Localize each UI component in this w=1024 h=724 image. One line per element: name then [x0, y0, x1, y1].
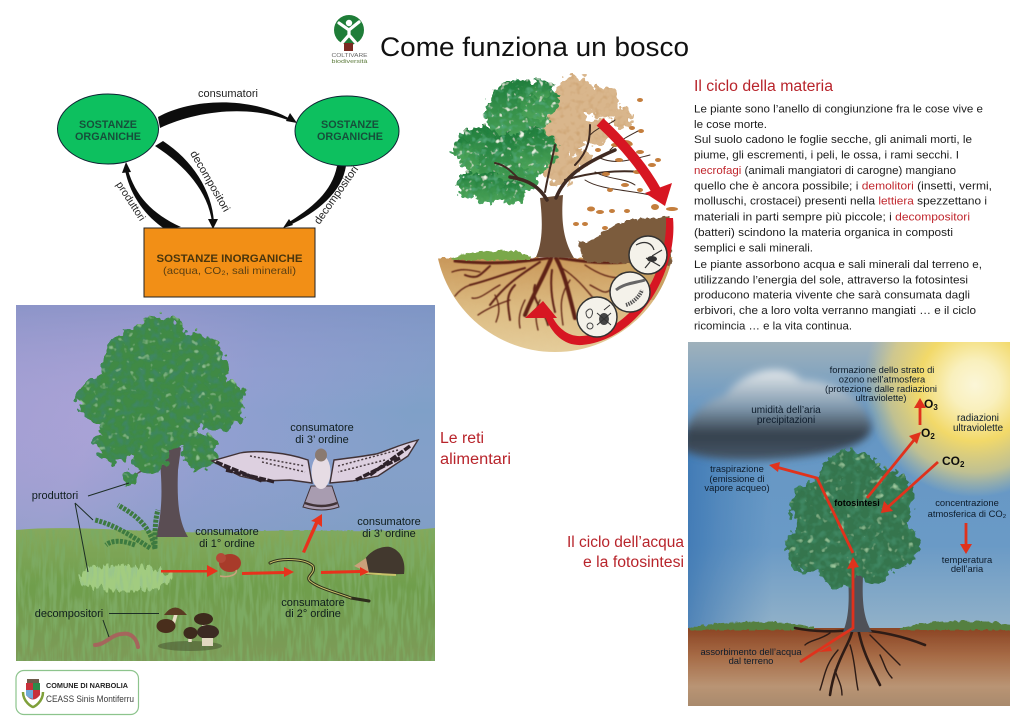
box: sostanze inorganiche: SOSTANZE INORGANICHE [156, 253, 303, 265]
labels: consumatore [290, 422, 354, 434]
ellipse: sostanze organiche right: ORGANICHE [317, 131, 383, 143]
footer badge: Comune di Narbolia [16, 670, 138, 714]
labels: fotosintesi [834, 498, 880, 508]
label: decompositori right: decompositori [312, 164, 361, 227]
sky [16, 305, 435, 540]
ellipse: sostanze organiche left [58, 94, 158, 164]
snake [270, 560, 369, 601]
logo: Coltivare biodiversità [332, 15, 369, 65]
roots [452, 256, 625, 330]
icon: municipal coat of arms [23, 679, 43, 707]
arrow: consumatori [158, 102, 297, 128]
labels: (protezione dalle radiazioni [825, 383, 937, 394]
arrowheads [769, 398, 972, 652]
text block: cycle of matter: erbivori, che a loro volta verranno mangiati … e il ciclo [694, 305, 976, 317]
chemical labels: 3 [933, 403, 938, 412]
hedgehog [354, 547, 404, 575]
labels: produttori [32, 490, 78, 502]
labels: (emissione di [709, 473, 765, 484]
trunk [536, 195, 574, 258]
labels [32, 422, 421, 620]
labels: radiazioni [957, 413, 999, 424]
branches [495, 120, 650, 200]
mouse [216, 553, 241, 577]
labels: umidità dell’aria [751, 405, 821, 416]
food chain arrows [161, 514, 369, 577]
text block: cycle of matter: materiali in parti sempre più piccole; i decompositori [694, 212, 970, 224]
decomposing mound [577, 216, 672, 265]
label: le reti alimentari: Le reti [440, 430, 484, 447]
panel: food web illustration [16, 305, 435, 661]
label: il ciclo dell'acqua e la fotosintesi: Il ciclo dell’acqua [567, 534, 684, 551]
text block: cycle of matter [694, 104, 992, 332]
labels [700, 364, 1007, 666]
label: il ciclo dell'acqua e la fotosintesi [567, 534, 684, 571]
text block: cycle of matter: ricomincia … e la vita continua. [694, 320, 852, 332]
text block: cycle of matter: le cose morte. [694, 119, 767, 131]
sun glow [866, 342, 1010, 494]
labels: di 3’ ordine [362, 528, 416, 540]
labels: ozono nell’atmosfera [839, 374, 926, 384]
text block: cycle of matter: (batteri) scindono la materia organica in composti [694, 227, 953, 239]
footer badge: Comune di Narbolia: COMUNE DI NARBOLIA [46, 681, 129, 690]
chemical labels: O [924, 397, 933, 411]
leader lines [75, 483, 159, 637]
logo: Coltivare biodiversità: COLTIVARE [332, 53, 368, 59]
soil half-disc [438, 257, 672, 352]
sky [688, 342, 1010, 632]
falling leaves [573, 98, 678, 230]
arrow: red crescent [525, 218, 673, 345]
labels: assorbimento dell’acqua [700, 646, 802, 657]
label: produttori: produttori [113, 179, 148, 223]
text block: cycle of matter: necrofagi (animali mangiatori di carogne) mangiano [694, 165, 956, 177]
labels: vapore acqueo) [704, 482, 770, 493]
soil [688, 628, 1010, 706]
grass tuft [79, 565, 171, 591]
text block: cycle of matter: molluschi, crostacei) presenti nella lettiera spezzettano i [694, 196, 987, 208]
ellipse: sostanze organiche right [295, 96, 399, 166]
text block: cycle of matter: Le piante sono l’anello di congiunzione fra le cose vive e [694, 104, 983, 116]
crown: green foliage [452, 80, 558, 204]
label: le reti alimentari [440, 430, 511, 468]
meadow [16, 528, 435, 661]
crown [786, 450, 919, 588]
title: Come funziona un bosco [380, 32, 689, 62]
labels: di 2° ordine [285, 608, 341, 620]
panel: water cycle and photosynthesis illustration [688, 342, 1010, 706]
chemical labels: CO [942, 454, 960, 468]
labels: di 1° ordine [199, 538, 255, 550]
labels: dal terreno [729, 655, 773, 666]
arrow: decompositori left [155, 141, 218, 229]
ellipse: sostanze organiche right: SOSTANZE [321, 119, 379, 131]
labels: temperatura [942, 554, 993, 565]
labels: di 3’ ordine [295, 434, 349, 446]
text block: cycle of matter: producono materia vivente che sarà consumata dagli [694, 290, 970, 302]
chemical labels [921, 397, 965, 469]
box: sostanze inorganiche: (acqua, CO₂, sali minerali) [163, 265, 296, 277]
labels: precipitazioni [757, 415, 815, 426]
labels: formazione dello strato di [830, 364, 934, 375]
text block: cycle of matter: piume, gli escrementi, i peli, le ossa, i rami secchi. I [694, 150, 959, 162]
box: sostanze inorganiche [144, 228, 315, 297]
labels: ultraviolette) [855, 392, 907, 403]
labels: concentrazione [935, 497, 999, 508]
labels: consumatore [281, 597, 345, 609]
diagram: cycle of organic and inorganic substances [58, 88, 399, 297]
illustration: tree and matter cycle [430, 76, 680, 358]
arrow: produttori [122, 162, 181, 229]
grass tuft [452, 250, 530, 260]
worm [95, 634, 138, 647]
labels: consumatore [357, 516, 421, 528]
labels: decompositori [35, 608, 103, 620]
detail circle: insects [629, 236, 667, 274]
text block: cycle of matter: semplici e sali minerali. [694, 242, 813, 254]
labels: dell’aria [951, 563, 984, 574]
chemical labels: 2 [960, 460, 965, 469]
ellipse: sostanze organiche left: ORGANICHE [75, 131, 141, 143]
heading: il ciclo della materia: Il ciclo della materia [694, 78, 833, 95]
text block: cycle of matter: utilizzando l’energia del sole, attraverso la fotosintesi [694, 274, 968, 286]
tree crown [76, 316, 246, 485]
cloud [682, 370, 872, 460]
label: le reti alimentari: alimentari [440, 451, 511, 468]
detail circle: larvae [610, 272, 650, 312]
process arrows [776, 405, 966, 662]
grass strip [690, 621, 1010, 630]
arrow: red down [600, 122, 672, 206]
label: decompositori middle: decompositori [187, 149, 232, 214]
crown: autumn foliage [541, 76, 632, 185]
detail circle: mite and grub [577, 297, 617, 337]
text block: cycle of matter: Sul suolo cadono le foglie secche, gli animali morti, le [694, 134, 972, 146]
roots [795, 628, 925, 695]
chemical labels: 2 [930, 432, 935, 441]
labels: atmosferica di CO₂ [928, 508, 1007, 519]
footer badge: Comune di Narbolia: CEASS Sinis Montiferru [46, 694, 134, 704]
trunk [843, 575, 872, 632]
fern [95, 505, 158, 549]
label: il ciclo dell'acqua e la fotosintesi: e la fotosintesi [583, 554, 684, 571]
text block: cycle of matter: quello che è ancora possibile; i demolitori (insetti, vermi, [694, 180, 992, 192]
trunk [136, 447, 188, 537]
arrow: decompositori right [283, 166, 346, 228]
labels: consumatore [195, 526, 259, 538]
mushrooms [156, 608, 222, 651]
labels: ultraviolette [953, 423, 1004, 434]
logo: Coltivare biodiversità: biodiversità [332, 59, 369, 65]
labels: traspirazione [710, 463, 764, 474]
ellipse: sostanze organiche left: SOSTANZE [79, 119, 137, 131]
chemical labels: O [921, 426, 930, 440]
label: consumatori: consumatori [198, 88, 258, 100]
text block: cycle of matter: Le piante assorbono acqua e sali minerali dal terreno e, [694, 259, 982, 271]
bird [212, 440, 418, 510]
